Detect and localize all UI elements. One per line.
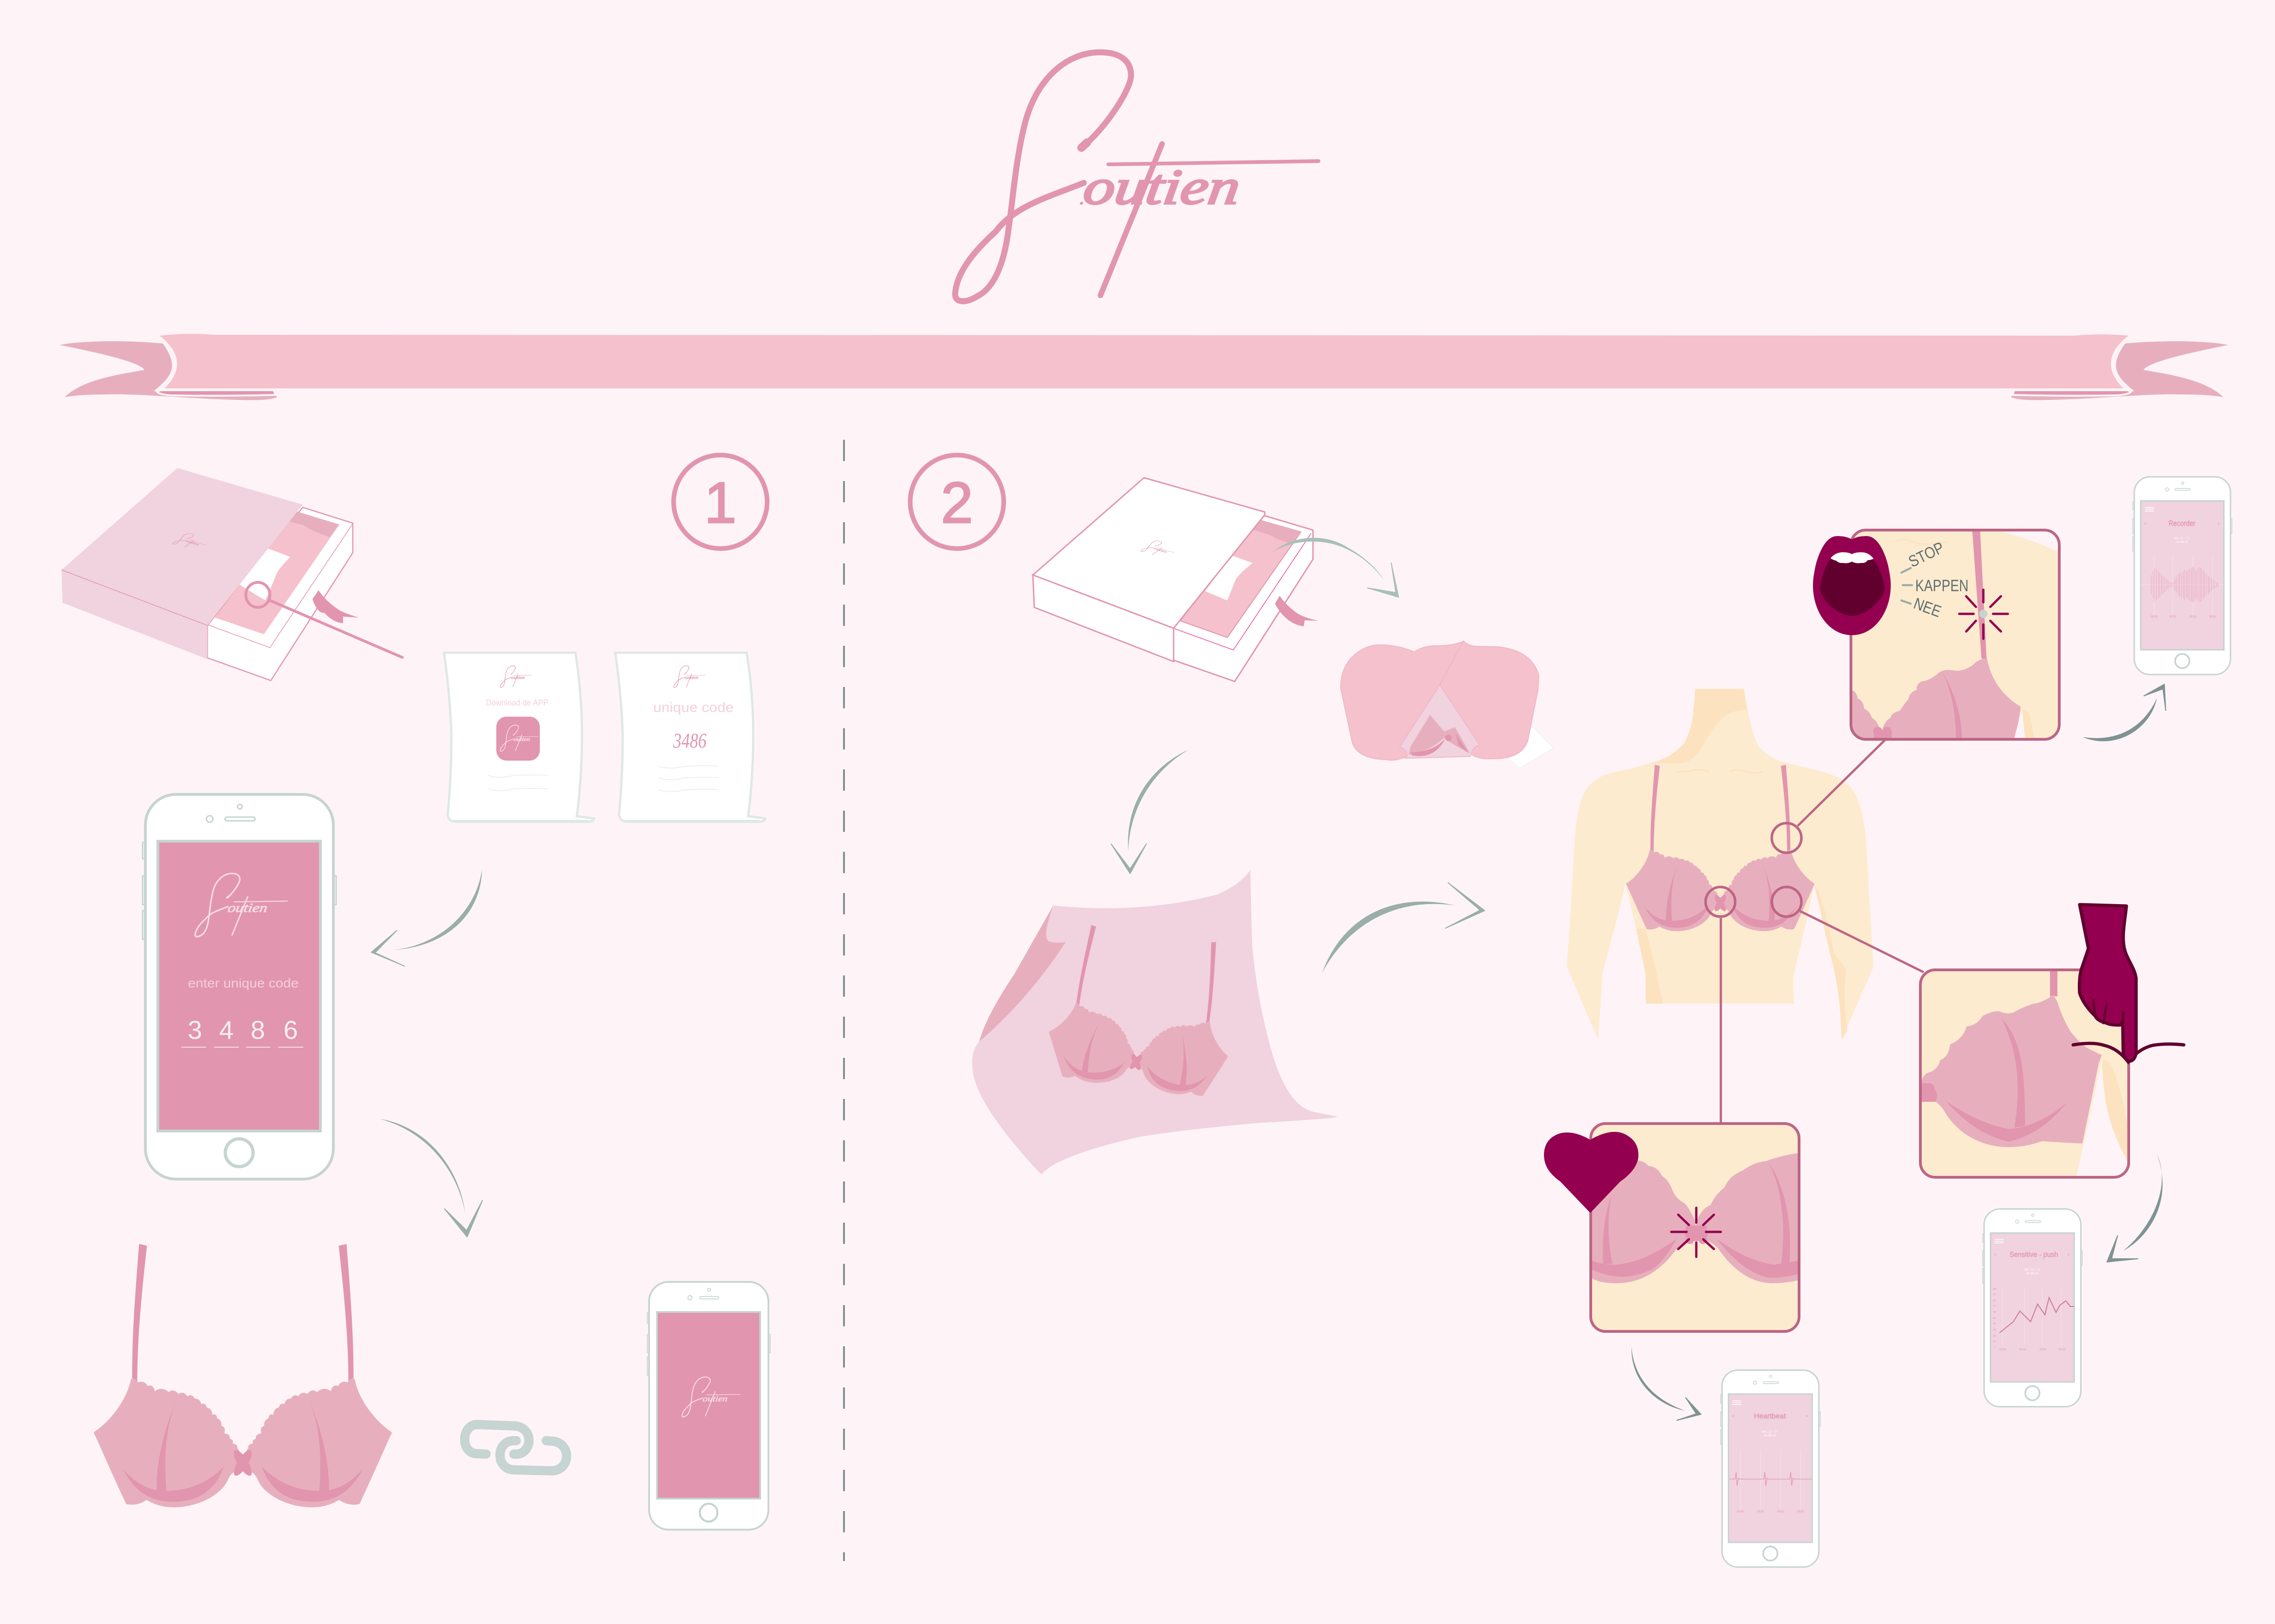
- y axis labels: 0: [1994, 1346, 1995, 1349]
- box logo: Soutien: [185, 539, 200, 546]
- dashed divider: [843, 440, 845, 1561]
- time labels: 00:01: [2169, 616, 2176, 618]
- date and time: 15:46:21: [2026, 1272, 2039, 1275]
- time labels: 00:01: [2189, 616, 2197, 618]
- date and time: 09 / 11 / 17: [2025, 1268, 2040, 1272]
- leaflet logo: [674, 666, 705, 687]
- code digits: 6: [283, 1015, 298, 1044]
- y axis labels: 40: [1993, 1323, 1996, 1325]
- nav arrows: <: [1732, 1414, 1735, 1418]
- code number: 3486: [673, 729, 706, 752]
- date and time: 09 / 11 / 17: [1762, 1430, 1778, 1434]
- big phone: enter code: [143, 794, 336, 1179]
- ribbon main band: [156, 332, 2132, 390]
- arrow: heartbeat inset to phone: [1631, 1347, 1701, 1420]
- word: nee: NEE: [1911, 594, 1944, 621]
- phone logo: Soutien: [702, 1394, 728, 1403]
- menu icon: [1732, 1401, 1741, 1405]
- arrow: sheet to body: [1322, 883, 1485, 973]
- inset: pressure trigger: [1920, 905, 2184, 1177]
- y axis labels: 100: [1993, 1288, 1996, 1291]
- box logo: [173, 530, 209, 553]
- arrow: pouch to sheet: [1111, 750, 1189, 874]
- digit underlines: [181, 1047, 303, 1048]
- y axis labels: 10: [1993, 1340, 1996, 1343]
- bra on body: [1626, 765, 1814, 931]
- code digits: 4: [219, 1015, 234, 1044]
- time labels: 00:00: [1737, 1511, 1744, 1513]
- heartbeat title: Heartbeat: [1754, 1412, 1786, 1420]
- unique code label: unique code: [653, 700, 734, 715]
- chain link icon: [465, 1424, 567, 1471]
- white box: [1033, 478, 1319, 681]
- leaflet: download app: [444, 653, 594, 822]
- date and time: [2025, 1268, 2040, 1275]
- heartbeat burst: [1671, 1208, 1721, 1257]
- arrow: pressure inset to phone: [2107, 1154, 2162, 1262]
- nav arrows: [1732, 1414, 1808, 1418]
- date and time: [2174, 537, 2190, 544]
- x axis labels: 00:01: [2019, 1349, 2026, 1351]
- y axis labels: 60: [1993, 1311, 1996, 1314]
- time labels: 00:01: [1757, 1511, 1764, 1513]
- leaflet logo: Soutien: [684, 676, 699, 681]
- nav arrows: >: [1806, 1414, 1808, 1418]
- code digits: 8: [250, 1015, 265, 1044]
- speech dashes: [1901, 568, 1912, 604]
- y axis labels: 90: [1993, 1293, 1996, 1296]
- torso silhouette: [1567, 689, 1874, 1040]
- magnifier callout: [246, 582, 402, 657]
- y axis labels: [1993, 1288, 1996, 1349]
- waveform grid: [2141, 555, 2224, 615]
- app icon: [496, 717, 540, 761]
- step number 1: [674, 455, 767, 549]
- panel: step 2: [910, 455, 2232, 1567]
- waveform: [2151, 567, 2218, 602]
- phone logo: Soutien: [227, 900, 269, 915]
- box logo: Soutien: [1153, 547, 1168, 554]
- arrow: voice inset to recorder phone: [2082, 684, 2166, 741]
- step number 1: 1: [704, 471, 737, 535]
- leaflet squiggles: [488, 775, 548, 791]
- sensitive title: Sensitive - push: [2009, 1251, 2058, 1259]
- nav arrows: >: [2217, 521, 2220, 526]
- phone with logo: [647, 1282, 770, 1530]
- bra illustration: [94, 1244, 392, 1507]
- recorder title: Recorder: [2169, 519, 2195, 528]
- title: Soutien script logo: Soutien: [1080, 159, 1244, 215]
- app icon: Soutien: [513, 737, 531, 743]
- ribbon right tail: [2011, 341, 2228, 400]
- panel: step 1: [62, 455, 770, 1530]
- y axis labels: 20: [1993, 1335, 1996, 1337]
- menu icon: [2145, 507, 2154, 511]
- time labels: 00:01: [1797, 1511, 1804, 1513]
- phone prompt: enter unique code: [188, 976, 299, 990]
- y axis labels: 80: [1993, 1299, 1996, 1302]
- time labels: 00:01: [1777, 1511, 1784, 1513]
- vibration burst: [1959, 590, 2008, 639]
- banner ribbon: [60, 332, 2228, 400]
- x axis labels: [1999, 1349, 2066, 1351]
- phone: heartbeat: [1721, 1370, 1820, 1567]
- date and time: [1762, 1430, 1778, 1437]
- time labels: 00:01: [2209, 616, 2216, 618]
- fabric sheet: [972, 870, 1338, 1174]
- ecg line: [1729, 1472, 1812, 1486]
- code digits: [188, 1015, 298, 1044]
- arrow: phone to bra: [380, 1119, 482, 1237]
- phone logo: [195, 874, 288, 937]
- time labels: [1737, 1511, 1804, 1513]
- chart grid: [1740, 1450, 1800, 1509]
- connector lines: [1721, 740, 1924, 1124]
- leaflet: unique code: [615, 653, 765, 822]
- sensor markers: [1706, 823, 1801, 917]
- body wearing bra: [1567, 689, 1874, 1040]
- bra on sheet: [1043, 921, 1243, 1100]
- leaflet logo: Soutien: [511, 676, 525, 681]
- date and time: 09 / 11 / 17: [2174, 537, 2190, 540]
- phone: recorder: [2133, 477, 2232, 675]
- time labels: 00:00: [2150, 616, 2158, 618]
- nav arrows: <: [2144, 521, 2147, 526]
- y axis labels: 50: [1993, 1317, 1996, 1320]
- time labels: [2150, 616, 2216, 618]
- inset: heartbeat: [1544, 1124, 1801, 1331]
- collarbone: [1676, 770, 1763, 773]
- step number 2: 2: [941, 471, 973, 535]
- nav arrows: <: [1994, 1252, 1997, 1257]
- pouch with bra: [1341, 641, 1554, 768]
- y axis labels: 30: [1993, 1329, 1996, 1331]
- word: kappen: KAPPEN: [1915, 577, 1969, 595]
- speech words: [1906, 538, 1969, 621]
- nav arrows: [2144, 521, 2220, 526]
- leaflet text: Download de APP: [486, 698, 548, 707]
- x axis labels: 00:01: [2039, 1349, 2047, 1351]
- pressure line chart: [2000, 1298, 2074, 1333]
- phone logo: [682, 1377, 740, 1417]
- body shading: [1636, 689, 1847, 1040]
- arrow: box to pouch: [1272, 538, 1399, 597]
- box logo: [1141, 537, 1177, 560]
- hand icon: [2073, 905, 2184, 1062]
- x axis labels: 00:01: [2058, 1349, 2066, 1351]
- ribbon left tail: [60, 341, 277, 400]
- word: stop: STOP: [1906, 538, 1947, 571]
- heart icon: [1544, 1132, 1638, 1213]
- title: Soutien script logo: [955, 52, 1319, 301]
- nav arrows: [1994, 1252, 2070, 1257]
- mouth icon: [1813, 536, 1891, 635]
- nav arrows: >: [2067, 1252, 2070, 1257]
- y axis labels: 70: [1993, 1305, 1996, 1308]
- x axis labels: 00:00: [1999, 1349, 2006, 1351]
- step number 2: [910, 455, 1004, 549]
- chart grid: [2002, 1288, 2061, 1346]
- phone: sensitive push: [1983, 1209, 2082, 1407]
- date and time: 15:46:21: [2175, 541, 2188, 544]
- arrow: leaflet to phone: [371, 869, 482, 966]
- menu icon: [1994, 1239, 2004, 1243]
- date and time: 15:46:21: [1763, 1434, 1776, 1437]
- inset: voice trigger: [1813, 530, 2059, 741]
- leaflet logo: [500, 666, 531, 687]
- leaflet squiggles: [658, 766, 719, 792]
- code digits: 3: [188, 1015, 202, 1044]
- pink box: [62, 468, 402, 681]
